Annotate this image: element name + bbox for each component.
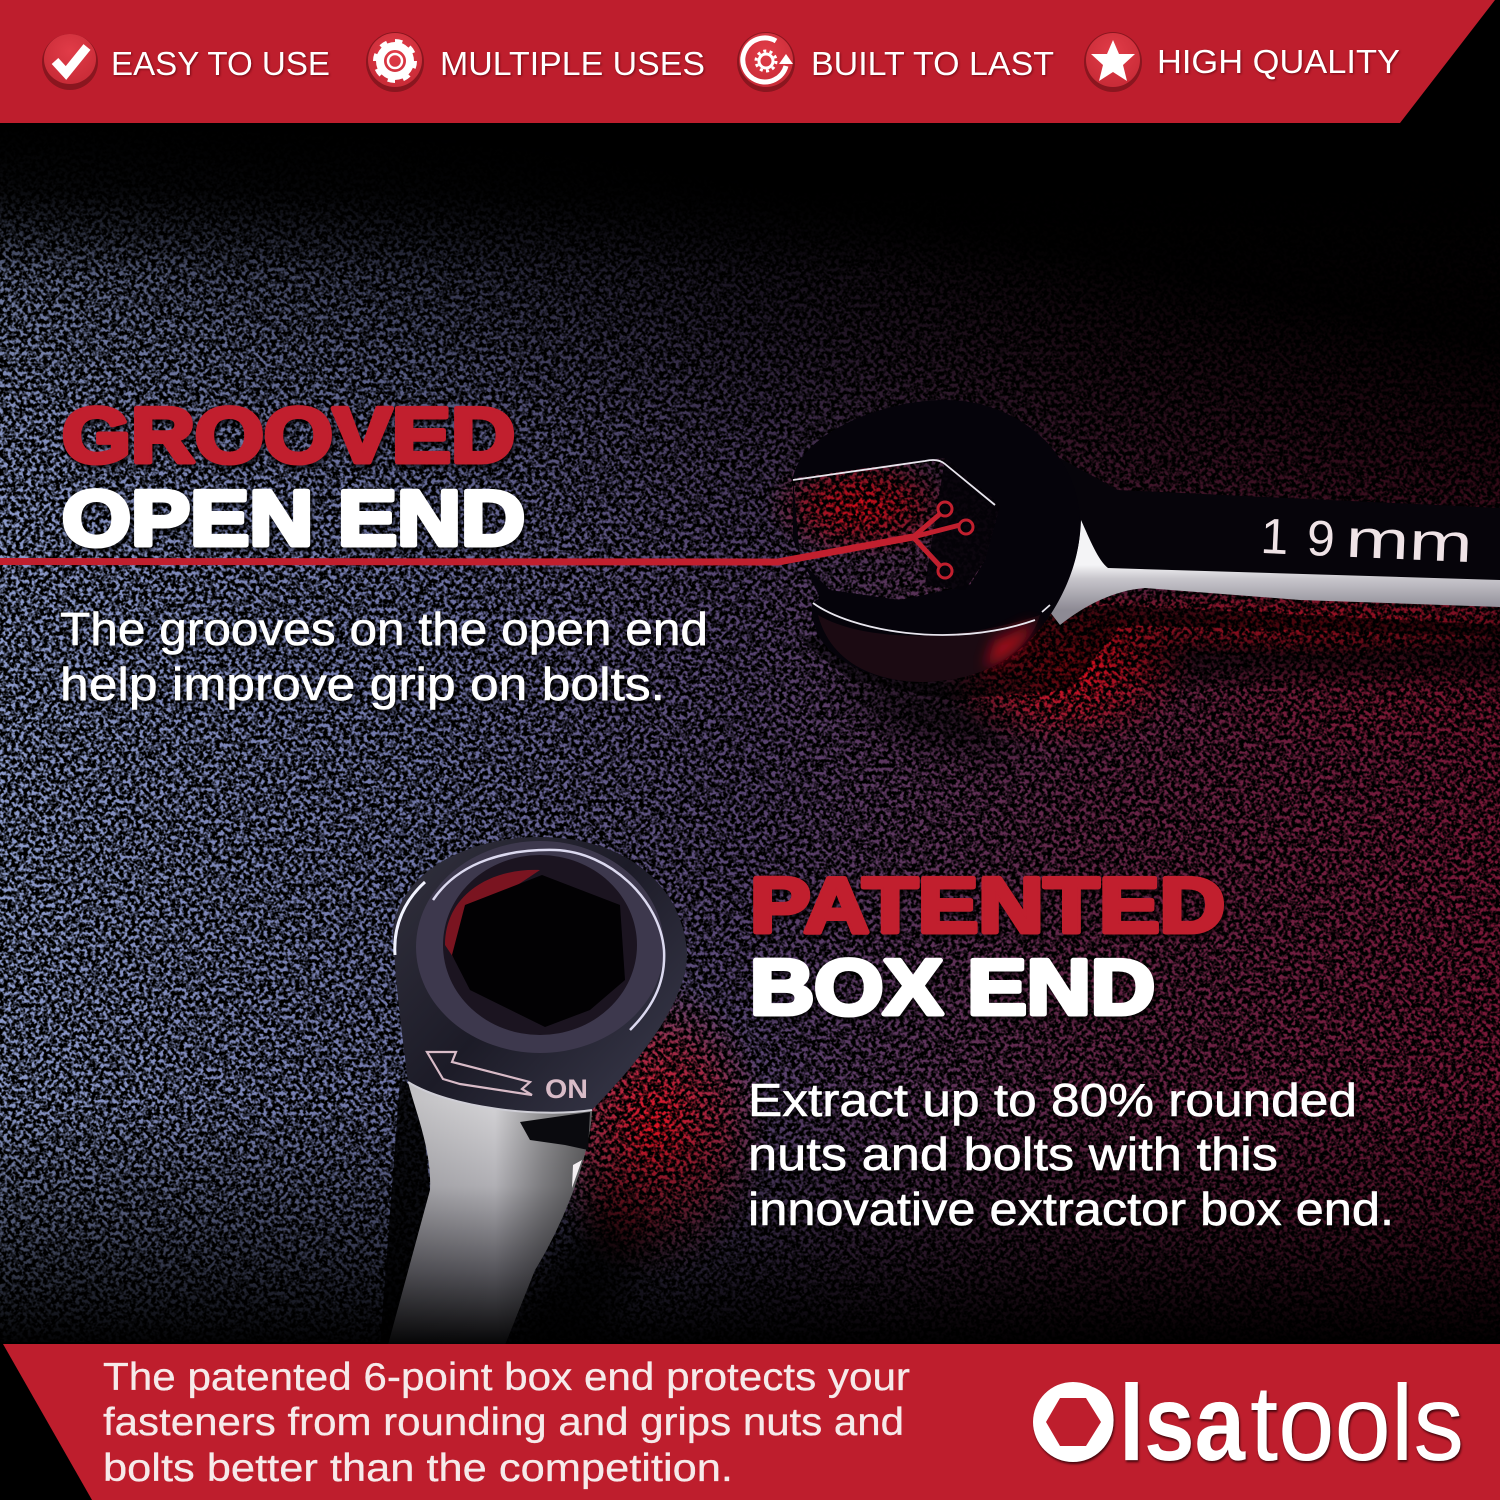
icon: check mark: [42, 34, 98, 90]
wrench chrome strip: [1050, 520, 1500, 625]
text: patent statement: [103, 1356, 910, 1490]
size marking 19mm: [1260, 505, 1474, 574]
feature: multiple uses: [366, 32, 705, 92]
heading: patented box end: [750, 861, 1225, 1031]
feature: easy to use: EASY TO USE: [111, 45, 330, 82]
icon: gear: [366, 32, 424, 92]
chrome handle: [388, 1082, 592, 1345]
logo: Olsatools: O: [1040, 1365, 1118, 1477]
heading: patented box end: PATENTED: [750, 861, 1225, 949]
socket hole: [443, 855, 637, 1035]
feature: built to last: [737, 32, 1054, 92]
callout line to grooves: [0, 502, 973, 578]
open end wrench: [793, 400, 1500, 700]
text: patent statement: bolts better than the competition.: [103, 1447, 733, 1490]
icon: cycle gear: [737, 32, 795, 92]
box end wrench: [380, 837, 687, 1345]
heading: patented box end: BOX END: [750, 943, 1155, 1031]
lower jaw red reflection: [985, 622, 1034, 668]
feature: high quality: HIGH QUALITY: [1157, 43, 1400, 80]
jaw highlights: [793, 460, 1050, 635]
text: patent statement: fasteners from rounding and grips nuts and: [103, 1401, 904, 1444]
banner shape: [3, 1344, 1500, 1500]
feature: built to last: BUILT TO LAST: [811, 45, 1054, 82]
top feature banner: [0, 0, 1495, 123]
size marking 19mm: 19: [1260, 508, 1336, 567]
text: box end description: Extract up to 80% rounded: [748, 1074, 1357, 1126]
text: open end description: help improve grip on bolts.: [60, 658, 665, 710]
ratchet direction arrow: [427, 1052, 532, 1095]
size marking 19mm: mm: [1344, 509, 1474, 574]
wrench head: [793, 400, 1080, 682]
icon: star: [1084, 32, 1142, 92]
head rim highlight: [395, 882, 425, 955]
heading: grooved open end: [62, 391, 525, 562]
wrench contact shadow: [800, 605, 1500, 700]
wrench shadow: [380, 1080, 430, 1345]
jaw inner wall: [925, 458, 1000, 590]
banner shape: [0, 0, 1495, 123]
wrench handle: [1060, 458, 1500, 582]
bevel ring: [416, 841, 664, 1053]
feature: high quality: [1084, 32, 1400, 92]
six point socket: [452, 875, 625, 1027]
text: open end description: The grooves on the open end: [60, 603, 708, 655]
lower jaw side: [818, 615, 1040, 682]
heading: grooved open end: GROOVED: [62, 391, 515, 479]
text: patent statement: The patented 6-point box end protects your: [103, 1356, 910, 1399]
text: open end description: [60, 603, 708, 710]
heading: grooved open end: OPEN END: [62, 474, 525, 562]
feature: multiple uses: MULTIPLE USES: [440, 45, 705, 82]
logo: Olsatools: tools: [1250, 1362, 1464, 1483]
feature: easy to use: [42, 34, 330, 90]
bottom banner: [3, 1344, 1500, 1500]
text: box end description: nuts and bolts with this: [748, 1128, 1278, 1180]
text: box end description: innovative extractor box end.: [748, 1183, 1394, 1235]
handle glint: [572, 1160, 582, 1188]
handle dark reflection: [520, 1112, 590, 1150]
text: box end description: [748, 1074, 1394, 1235]
logo: Olsatools: [1033, 1362, 1464, 1483]
box head: [393, 837, 687, 1113]
logo: Olsatools: lsa: [1119, 1362, 1246, 1483]
on marking: ON: [545, 1074, 588, 1104]
